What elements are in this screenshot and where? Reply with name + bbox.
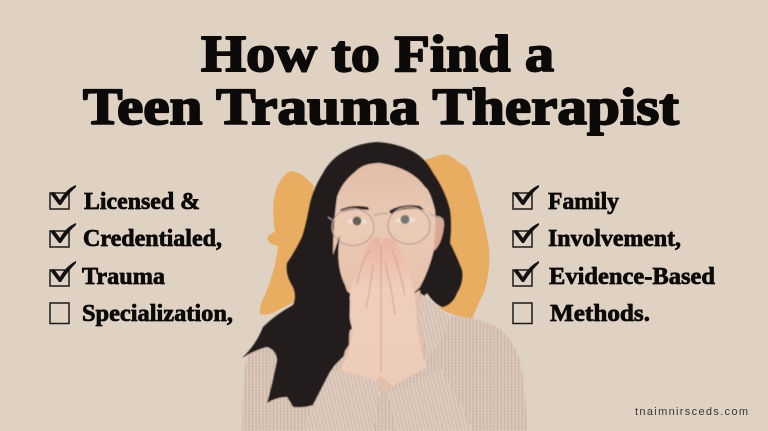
ear (434, 216, 444, 251)
hair (242, 142, 462, 407)
item: specialization: Specialization, (82, 300, 233, 327)
face (333, 163, 437, 310)
item: licensed (50, 185, 200, 215)
hands (340, 237, 427, 386)
item: licensed: Licensed & (84, 188, 200, 215)
item: trauma (50, 261, 165, 290)
sweater (242, 315, 527, 431)
neck (340, 290, 423, 392)
left checklist (50, 185, 233, 327)
right checklist (513, 185, 715, 327)
title: Teen Trauma Therapist (83, 79, 680, 136)
item: family (513, 185, 620, 215)
item: trauma: Trauma (82, 263, 165, 290)
item: methods: Methods. (550, 300, 650, 327)
item: evidence-based: Evidence-Based (549, 263, 715, 290)
collar (419, 293, 450, 357)
item: credentialed: Credentialed, (83, 225, 222, 252)
sleeve right (387, 368, 472, 431)
eyebrows (340, 205, 424, 214)
person (242, 142, 527, 431)
orange blob right (425, 154, 489, 320)
item: family: Family (548, 188, 620, 215)
glasses (328, 207, 443, 246)
sleeve left (302, 370, 380, 431)
item: involvement: Involvement, (548, 225, 681, 252)
website url: tnaimnirsceds.com (635, 406, 748, 418)
title: How to Find a (201, 26, 554, 83)
hair front strand (300, 235, 350, 405)
eyes (346, 215, 416, 226)
title (83, 26, 680, 136)
orange blob left (260, 171, 314, 315)
finger lines (357, 245, 405, 372)
